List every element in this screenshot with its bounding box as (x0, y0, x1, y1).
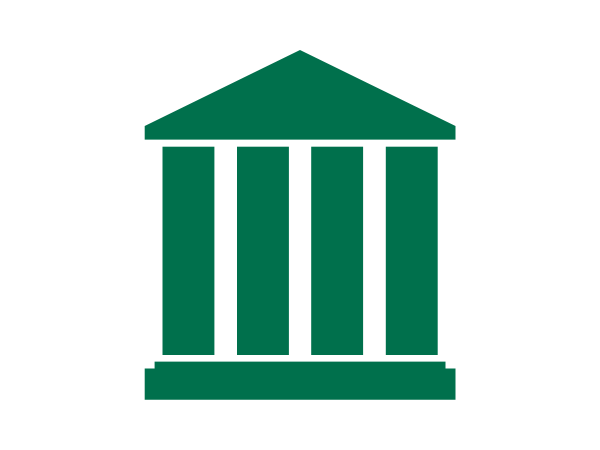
stepped base (145, 362, 455, 400)
columns (162, 147, 438, 355)
roof pediment (145, 50, 455, 140)
